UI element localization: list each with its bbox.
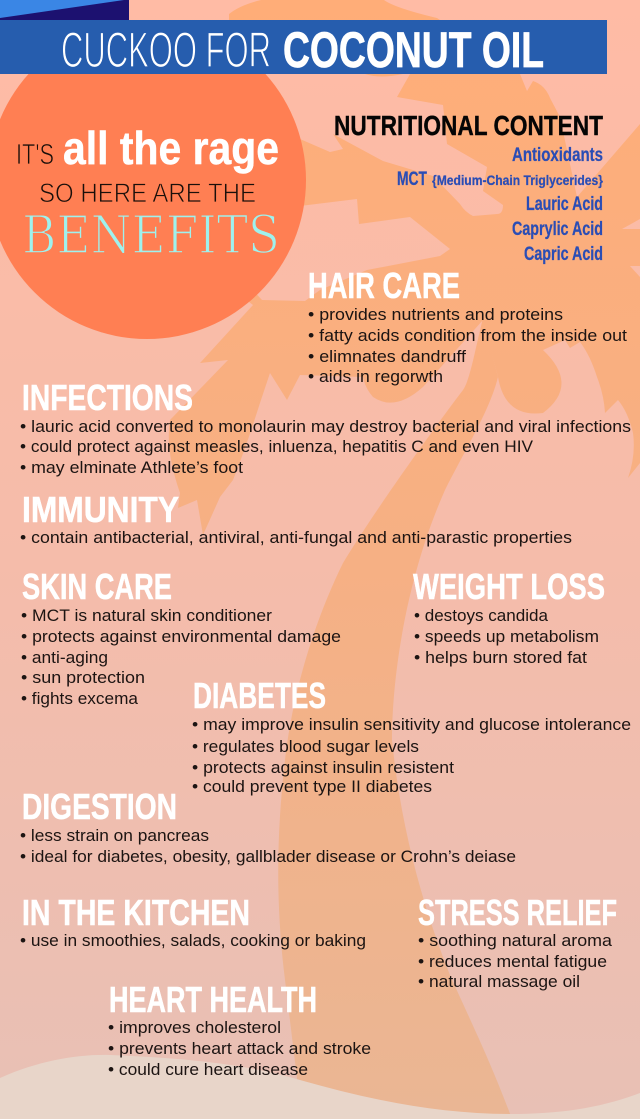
section: diabetes <box>192 675 631 796</box>
nutritional content: Capric Acid <box>524 244 603 265</box>
section: infections: • lauric acid converted to monolaurin may destroy bacterial and viral infections <box>20 417 631 436</box>
section: diabetes: • regulates blood sugar levels <box>192 737 419 756</box>
section: heart health <box>108 979 371 1079</box>
section: immunity <box>20 489 572 547</box>
circle badge <box>0 21 306 339</box>
corner ribbon <box>0 0 129 20</box>
section: hair care: • elimnates dandruff <box>308 347 466 366</box>
section: heart health: • prevents heart attack and stroke <box>108 1039 371 1058</box>
circle badge: SO HERE ARE THE <box>39 178 256 208</box>
circle badge: IT'S <box>16 139 54 171</box>
section: diabetes: • protects against insulin resistent <box>192 758 454 777</box>
section: weight loss: • destoys candida <box>414 606 549 625</box>
section: stress relief: • soothing natural aroma <box>418 931 613 950</box>
nutritional content <box>334 110 603 265</box>
section: digestion: • less strain on pancreas <box>20 826 209 845</box>
section: skin care: • sun protection <box>21 668 145 687</box>
section: hair care: • aids in regorwth <box>308 367 443 386</box>
nutritional content: Lauric Acid <box>526 194 603 215</box>
section: skin care: • MCT is natural skin conditioner <box>21 606 272 625</box>
nutritional content: {Medium-Chain Triglycerides} <box>432 172 603 188</box>
section: heart health: HEART HEALTH <box>109 979 317 1020</box>
section: skin care <box>21 566 341 708</box>
section: heart health: • improves cholesterol <box>108 1018 281 1037</box>
section: immunity: IMMUNITY <box>22 489 179 530</box>
section: stress relief: • natural massage oil <box>418 972 580 991</box>
section: weight loss: • speeds up metabolism <box>414 627 599 646</box>
section: diabetes: DIABETES <box>193 675 326 716</box>
section: in the kitchen <box>20 892 366 950</box>
nutritional content: Antioxidants <box>512 145 603 166</box>
section: skin care: • protects against environmental damage <box>21 627 341 646</box>
title banner <box>0 20 607 78</box>
circle badge: BENEFITS <box>22 206 280 266</box>
nutritional content: MCT <box>397 169 427 190</box>
section: hair care <box>308 265 627 386</box>
section: in the kitchen: IN THE KITCHEN <box>22 892 250 933</box>
section: in the kitchen: • use in smoothies, salads, cooking or baking <box>20 931 366 950</box>
section: digestion <box>20 786 516 866</box>
nutritional content: Caprylic Acid <box>512 219 603 240</box>
section: skin care: • anti-aging <box>21 648 108 667</box>
section: hair care: HAIR CARE <box>308 265 460 306</box>
section: diabetes: • could prevent type II diabetes <box>192 777 432 796</box>
section: skin care: • fights excema <box>21 689 139 708</box>
section: diabetes: • may improve insulin sensitivity and glucose intolerance <box>192 715 631 734</box>
section: infections: • may elminate Athlete’s foot <box>20 458 243 477</box>
title banner: COCONUT OIL <box>283 22 544 78</box>
ground hill <box>0 1055 640 1119</box>
section: stress relief <box>418 892 617 991</box>
section: infections <box>20 377 631 477</box>
circle badge: all the rage <box>63 122 279 174</box>
section: heart health: • could cure heart disease <box>108 1060 308 1079</box>
section: digestion: • ideal for diabetes, obesity, gallblader disease or Crohn’s deiase <box>20 847 516 866</box>
section: hair care: • fatty acids condition from the inside out <box>308 326 627 345</box>
section: weight loss <box>413 566 605 667</box>
section: skin care: SKIN CARE <box>22 566 172 607</box>
section: stress relief: • reduces mental fatigue <box>418 952 607 971</box>
section: digestion: DIGESTION <box>22 786 177 827</box>
section: infections: • could protect against measles, inluenza, hepatitis C and even HIV <box>20 437 534 456</box>
section: immunity: • contain antibacterial, antiviral, anti-fungal and anti-parastic properties <box>20 528 572 547</box>
section: infections: INFECTIONS <box>22 377 193 418</box>
section: weight loss: • helps burn stored fat <box>414 648 587 667</box>
section: hair care: • provides nutrients and proteins <box>308 305 563 324</box>
title banner: CUCKOO FOR <box>61 22 271 78</box>
palm tree silhouette <box>169 0 640 1119</box>
